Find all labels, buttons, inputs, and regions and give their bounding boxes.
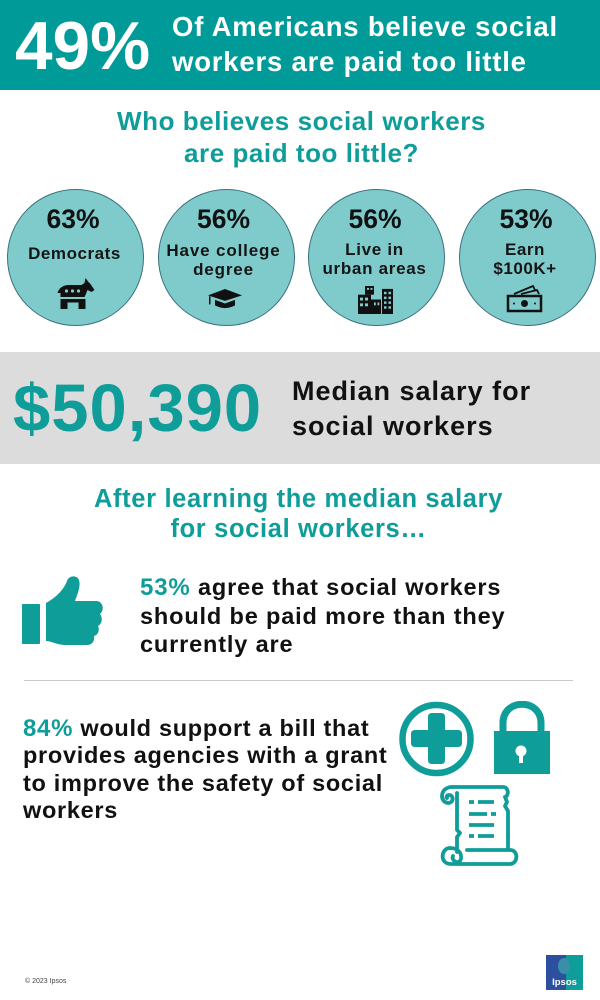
icon: graduation cap — [208, 289, 242, 308]
panel: Democrats — [7, 189, 144, 326]
stat text: 53% agree: should be paid more than they — [140, 603, 505, 629]
header banner — [0, 0, 600, 90]
stat text: 53% agree: currently are — [140, 631, 293, 657]
section heading: after learning: After learning the median salary — [94, 485, 503, 513]
label: urban areas — [322, 259, 427, 278]
logo: Ipsos — [546, 955, 583, 990]
copyright: © 2023 Ipsos — [25, 978, 66, 985]
salary caption: social workers — [292, 411, 494, 441]
percentage: 56% — [348, 204, 402, 234]
icon: city buildings — [358, 286, 393, 314]
label: Live in — [345, 240, 404, 259]
stat text: 84% support: 84% would support a bill that — [23, 715, 369, 742]
stat text: 53% agree: 53% agree that social workers — [140, 574, 501, 601]
section heading: who believes: Who believes social workers — [117, 106, 486, 136]
stat text: 84% support: to improve the safety of social — [23, 770, 383, 796]
stat text: 84% support: provides agencies with a grant — [23, 742, 387, 768]
label — [166, 241, 281, 279]
icon: donkey — [58, 278, 94, 309]
headline text — [172, 11, 558, 77]
panel: earn 100K — [459, 189, 596, 326]
label: Democrats — [28, 244, 121, 263]
headline text: workers are paid too little — [172, 46, 527, 77]
icon: money — [506, 285, 542, 312]
icon: thumbs up — [22, 576, 103, 645]
stat text: 53% agree — [140, 574, 505, 657]
icon: padlock — [494, 701, 550, 774]
salary figure: $50,390 — [13, 371, 262, 446]
icon: scroll document — [440, 785, 518, 866]
logo: Ipsos: Ipsos — [552, 977, 577, 988]
salary band — [0, 352, 600, 464]
stat text: 84% support — [23, 715, 387, 823]
label: Have college — [166, 241, 281, 260]
headline statistic: 49% — [15, 9, 150, 84]
percentage: 63% — [46, 204, 100, 234]
panel: college degree — [158, 189, 295, 326]
label — [322, 240, 427, 278]
salary caption — [292, 376, 531, 441]
stat text: 84% support: workers — [23, 797, 118, 823]
divider — [24, 680, 573, 681]
label: Earn — [505, 240, 545, 259]
percentage: 53% — [499, 204, 553, 234]
section heading: after learning — [94, 485, 503, 543]
salary caption: Median salary for — [292, 376, 531, 406]
label — [493, 240, 557, 278]
icon: medical cross — [399, 702, 474, 776]
section heading: who believes: are paid too little? — [184, 138, 419, 168]
section heading: who believes — [117, 106, 486, 168]
section heading: after learning: for social workers… — [170, 515, 427, 543]
percentage: 56% — [197, 204, 250, 234]
panel: urban areas — [308, 189, 445, 326]
headline text: Of Americans believe social — [172, 11, 558, 42]
label: $100K+ — [493, 259, 557, 278]
label: degree — [193, 260, 254, 279]
